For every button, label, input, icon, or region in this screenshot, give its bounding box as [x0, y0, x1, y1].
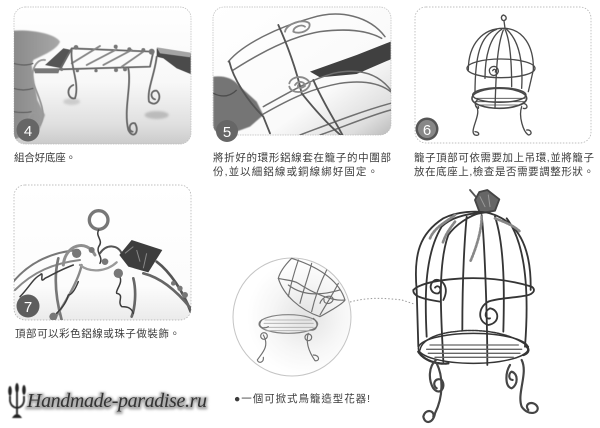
main image: finished wire birdcage: [413, 190, 538, 422]
badge: step number 4: 4: [24, 123, 32, 140]
badge: step number 7: [16, 294, 40, 318]
dotted connector line: [350, 298, 414, 304]
watermark: Handmade-paradise.ru: [8, 383, 207, 418]
badge: step number 4: [16, 118, 40, 142]
panel: step 6 cage on base photo: [415, 7, 591, 143]
caption: step 5: 將折好的環形鋁線套在籠子的中圍部: [213, 151, 391, 164]
panel: step 7 top decoration photo: [13, 185, 191, 321]
badge: step number 7: 7: [24, 299, 32, 316]
badge: step number 5: 5: [223, 124, 231, 141]
watermark: Handmade-paradise.ru: Handmade-paradise.ru: [26, 390, 207, 412]
badge: step number 6: 6: [423, 122, 431, 139]
caption: step 4: 組合好底座。: [14, 151, 76, 164]
caption: step 6: 籠子頂部可依需要加上吊環,並將籠子: [414, 151, 594, 164]
caption: step 6: 放在底座上,檢查是否需要調整形狀。: [414, 165, 594, 178]
caption: flower cage note: ●一個可掀式鳥籠造型花器!: [234, 392, 370, 405]
badge: step number 6: [416, 118, 438, 140]
panel: step 5 fixing ring photo: [213, 7, 391, 142]
caption: step 6: [414, 151, 594, 178]
panel: step 4 assembled base photo: [13, 7, 191, 144]
caption: step 5: 份,並以細鋁線或銅線綁好固定。: [213, 165, 378, 178]
cage base tray: [418, 330, 528, 364]
caption: step 7: 頂部可以彩色鋁線或珠子做裝飾。: [15, 327, 180, 340]
cage legs: [423, 360, 538, 422]
icon: candelabra: [8, 383, 26, 418]
badge: step number 5: [216, 120, 238, 142]
watermark: Handmade-paradise.ru: Handmade-paradise.ru: [26, 391, 207, 413]
hanging bead strands: [430, 215, 520, 261]
caption: step 5: [213, 151, 391, 178]
callout circle: opened cage detail: [233, 258, 351, 376]
ornament: leaf bead on top: [470, 190, 499, 213]
